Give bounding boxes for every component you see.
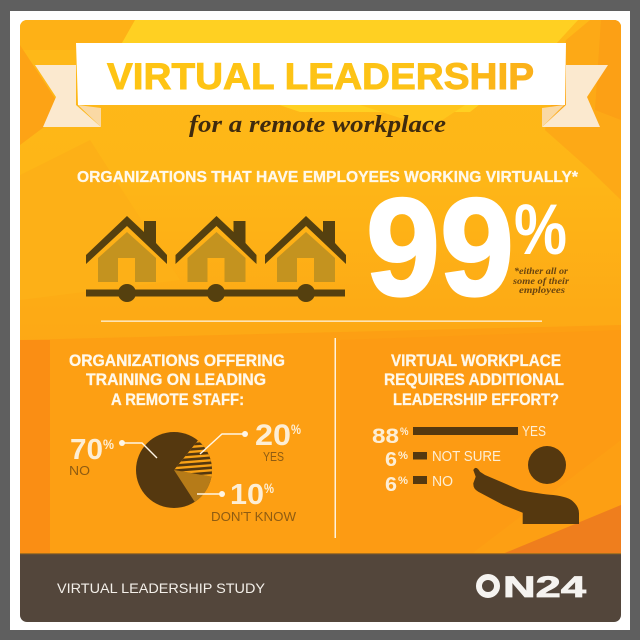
- callout: 10% don't know: [197, 479, 297, 524]
- icon: person pointing: [473, 446, 579, 524]
- timeline: [86, 284, 345, 302]
- bar chart: [372, 424, 546, 496]
- footer label: VIRTUAL LEADERSHIP STUDY: [57, 581, 266, 597]
- bar: no 6%: [385, 473, 453, 496]
- icon: house 1: [86, 216, 167, 282]
- heading: leadership effort: VIRTUAL WORKPLACE: [391, 352, 561, 370]
- bar: yes 88%: [372, 424, 546, 448]
- panel: additional leadership effort: [372, 352, 579, 524]
- title banner: [76, 43, 566, 105]
- logo: ON24: N24: [503, 571, 586, 604]
- panel: training on leading remote staff: [69, 352, 301, 524]
- vertical divider: [334, 338, 336, 538]
- bar: yes 88%: YES: [522, 424, 546, 440]
- big number 99%: %: [514, 191, 567, 270]
- title: VIRTUAL LEADERSHIP: [107, 55, 534, 97]
- callout: 20% yes: YES: [263, 450, 284, 464]
- callout: 20% yes: 20: [255, 419, 291, 452]
- ribbon tail right: [542, 65, 608, 127]
- bar: no 6%: %: [398, 475, 408, 487]
- logo: ON24: [479, 571, 586, 604]
- callout: 10% don't know: 10: [230, 479, 264, 511]
- subtitle: for a remote workplace: [189, 112, 446, 138]
- heading: leadership effort: LEADERSHIP EFFORT?: [393, 391, 559, 409]
- callout: 10% don't know: %: [264, 480, 274, 496]
- footnote: *either all or: [514, 266, 568, 277]
- bar: no 6%: NO: [432, 473, 453, 490]
- callout: 70% no: 70: [70, 434, 103, 466]
- heading: training: A REMOTE STAFF:: [111, 391, 244, 409]
- big number 99%: 99: [366, 170, 514, 325]
- ribbon tail left: [35, 65, 101, 127]
- footnote: some of their: [512, 277, 569, 287]
- footnote: [512, 266, 569, 296]
- bar: yes 88%: %: [400, 426, 409, 438]
- icon: three houses on a line: [86, 216, 346, 302]
- heading: training: TRAINING ON LEADING: [86, 371, 266, 389]
- heading: leadership effort: REQUIRES ADDITIONAL: [384, 371, 564, 389]
- heading: leadership effort: [384, 352, 564, 409]
- icon: house 3: [265, 216, 346, 282]
- bar: not sure 6%: NOT SURE: [432, 448, 501, 465]
- footer bar: [20, 553, 621, 622]
- pie chart: [136, 432, 220, 508]
- footnote: employees: [519, 286, 565, 296]
- bar: not sure 6%: %: [398, 450, 408, 462]
- icon: house 2: [176, 216, 256, 282]
- heading: training: ORGANIZATIONS OFFERING: [69, 352, 285, 370]
- heading: organizations with virtual employees: ORGANIZATIONS THAT HAVE EMPLOYEES WORKING VIRTUALLY*: [77, 169, 579, 186]
- bar: not sure 6%: [385, 448, 501, 471]
- bar: yes 88%: 88: [372, 425, 399, 448]
- callout: 20% yes: %: [291, 421, 301, 437]
- callout: 70% no: %: [103, 436, 114, 452]
- callout: 70% no: NO: [69, 464, 90, 478]
- horizontal divider: [101, 320, 542, 322]
- callout: 10% don't know: DON'T KNOW: [211, 509, 297, 524]
- bar: no 6%: 6: [385, 474, 397, 496]
- heading: training: [69, 352, 285, 409]
- callout: 70% no: [69, 434, 157, 478]
- callout: 20% yes: [200, 419, 301, 464]
- bar: not sure 6%: 6: [385, 449, 397, 471]
